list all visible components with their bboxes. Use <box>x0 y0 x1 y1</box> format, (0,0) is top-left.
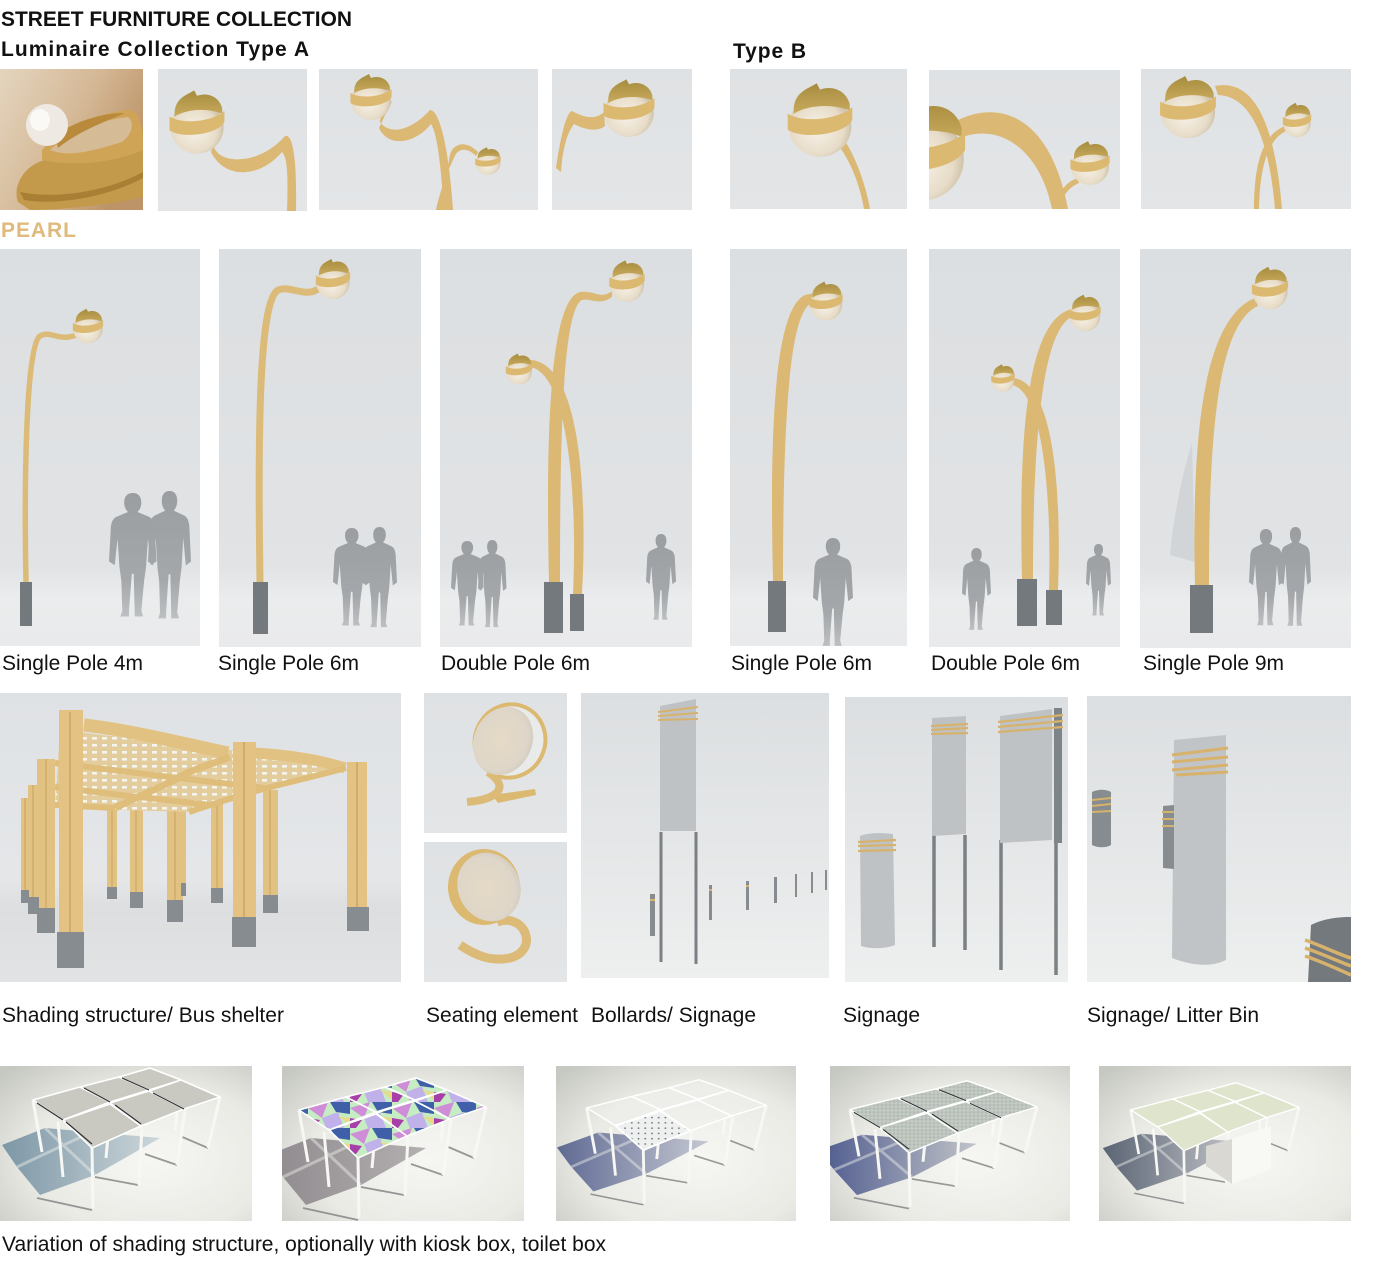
panel: shading variation with curved grey tiles <box>0 1066 252 1221</box>
caption: shading structure and bus shelter: Shading structure/ Bus shelter <box>2 1004 284 1027</box>
heading: street furniture collection: STREET FURNITURE COLLECTION <box>1 8 352 31</box>
panel: type B close-up 1 <box>730 69 907 209</box>
caption: seating element: Seating element <box>426 1004 578 1027</box>
panel: shading variation with mosaic tiles <box>282 1066 524 1221</box>
panel: double pole 6m type B <box>929 249 1120 647</box>
caption: variation of shading structure: Variation of shading structure, optionally with kiosk box, toilet box <box>2 1233 606 1256</box>
panel: seating element 1 <box>424 693 567 833</box>
panel: type B close-up 3 <box>1141 69 1351 209</box>
caption: single pole 9m: Single Pole 9m <box>1143 652 1284 675</box>
caption: single pole 6m: Single Pole 6m <box>218 652 359 675</box>
panel: shading variation with speckled tiles <box>830 1066 1070 1221</box>
panel: single pole 4m <box>0 249 200 646</box>
caption: double pole 6m: Double Pole 6m <box>441 652 590 675</box>
panel: seating element 2 <box>424 842 567 982</box>
panel: type A close-up 2 <box>319 69 538 210</box>
panel: shading variation with kiosk box <box>1099 1066 1351 1221</box>
panel: single pole 9m <box>1140 249 1351 648</box>
caption: signage: Signage <box>843 1004 920 1027</box>
panel: shading variation with glass tiles <box>556 1066 796 1221</box>
panel: shading structure <box>0 693 401 982</box>
panel: signage <box>845 697 1068 982</box>
panel: type B close-up 2 <box>929 70 1120 209</box>
panel: type A wall close-up <box>552 69 692 210</box>
caption: single pole 6m type B: Single Pole 6m <box>731 652 872 675</box>
heading: pearl: PEARL <box>1 219 76 242</box>
caption: double pole 6m type B: Double Pole 6m <box>931 652 1080 675</box>
heading: type B: Type B <box>733 40 806 63</box>
panel: bollards and signage <box>581 693 829 978</box>
panel: signage and litter bin <box>1087 696 1351 982</box>
panel: single pole 6m <box>219 249 421 647</box>
caption: single pole 4m: Single Pole 4m <box>2 652 143 675</box>
panel: single pole 6m type B <box>730 249 907 646</box>
caption: bollards and signage: Bollards/ Signage <box>591 1004 756 1027</box>
heading: luminaire collection type A: Luminaire Collection Type A <box>1 38 309 61</box>
panel: type A close-up 1 <box>158 69 307 211</box>
panel: double pole 6m type A <box>440 249 692 647</box>
caption: signage and litter bin: Signage/ Litter Bin <box>1087 1004 1259 1027</box>
photo: pearl ring inspiration <box>0 69 143 210</box>
